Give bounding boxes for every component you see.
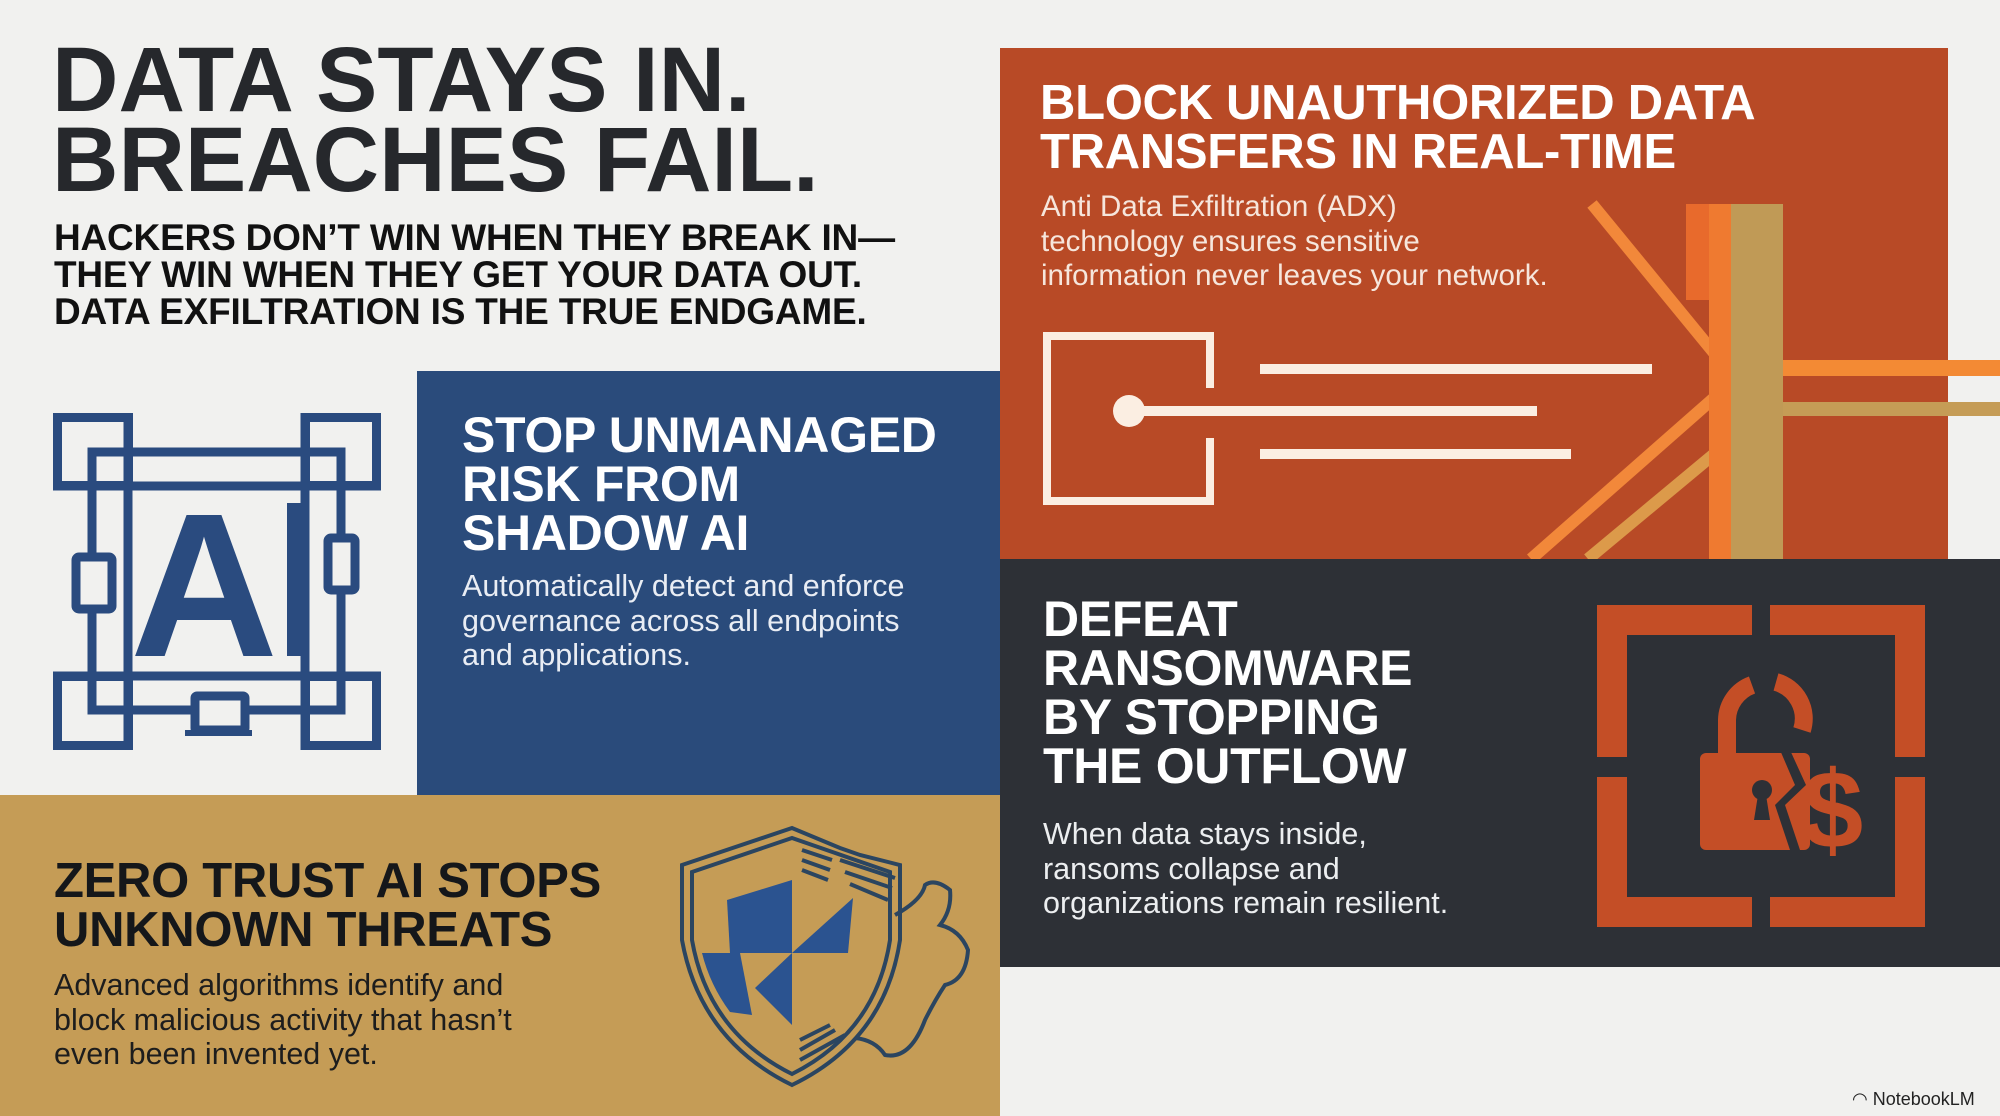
text: ransomware: When data stays inside, <box>1043 817 1367 851</box>
heading: block transfers: BLOCK UNAUTHORIZED DATA <box>1040 76 1755 130</box>
icon: broken lock with brackets <box>1597 605 1925 927</box>
heading: shadow AI: SHADOW AI <box>462 505 749 561</box>
text: shadow AI <box>462 569 905 672</box>
heading: block transfers: TRANSFERS IN REAL-TIME <box>1040 125 1676 179</box>
text: block transfers: Anti Data Exfiltration (ADX) <box>1041 190 1397 223</box>
panel: zero trust <box>0 795 1000 1116</box>
heading: shadow AI: RISK FROM <box>462 456 740 512</box>
heading: zero trust: ZERO TRUST AI STOPS <box>54 854 601 908</box>
heading: ransomware: DEFEAT <box>1043 591 1238 647</box>
subtitle <box>54 217 896 332</box>
text: ransomware: organizations remain resilient. <box>1043 886 1448 920</box>
icon: broken lock with brackets: $ <box>1802 749 1863 872</box>
text: zero trust: block malicious activity that hasn’t <box>54 1002 512 1036</box>
text: zero trust: even been invented yet. <box>54 1037 378 1071</box>
text: block transfers <box>1041 190 1548 292</box>
text: block transfers: information never leaves your network. <box>1041 259 1548 292</box>
heading: zero trust <box>54 854 601 957</box>
text: block transfers: technology ensures sensitive <box>1041 224 1420 258</box>
heading: ransomware: THE OUTFLOW <box>1043 738 1406 794</box>
panel: block transfers <box>1000 48 1948 559</box>
text: shadow AI: and applications. <box>462 638 691 672</box>
panel: shadow AI <box>417 371 1000 795</box>
heading: zero trust: UNKNOWN THREATS <box>54 903 552 957</box>
subtitle: THEY WIN WHEN THEY GET YOUR DATA OUT. <box>54 254 862 295</box>
icon: AI network <box>53 413 381 750</box>
text: shadow AI: Automatically detect and enforce <box>462 569 905 603</box>
heading: ransomware <box>1043 591 1412 794</box>
text: ransomware: ransoms collapse and <box>1043 852 1340 886</box>
title: BREACHES FAIL. <box>52 109 819 211</box>
title: DATA STAYS IN. <box>52 29 751 131</box>
title <box>52 29 819 211</box>
heading: shadow AI <box>462 407 937 561</box>
text: zero trust: Advanced algorithms identify and <box>54 968 503 1002</box>
heading: shadow AI: STOP UNMANAGED <box>462 407 937 463</box>
text: ransomware <box>1043 817 1448 920</box>
heading: ransomware: RANSOMWARE <box>1043 640 1412 696</box>
panel: ransomware <box>1000 559 2000 967</box>
heading: ransomware: BY STOPPING <box>1043 689 1380 745</box>
illustration: data flow blocked <box>1043 200 2000 559</box>
subtitle: HACKERS DON’T WIN WHEN THEY BREAK IN— <box>54 217 895 258</box>
subtitle: DATA EXFILTRATION IS THE TRUE ENDGAME. <box>54 291 867 332</box>
icon: shield <box>680 826 970 1088</box>
logo: NotebookLM: ◠ NotebookLM <box>1852 1089 1975 1109</box>
text: zero trust <box>54 968 512 1071</box>
text: shadow AI: governance across all endpoints <box>462 604 899 638</box>
icon: AI network: A <box>130 471 278 700</box>
heading: block transfers <box>1040 76 1755 179</box>
